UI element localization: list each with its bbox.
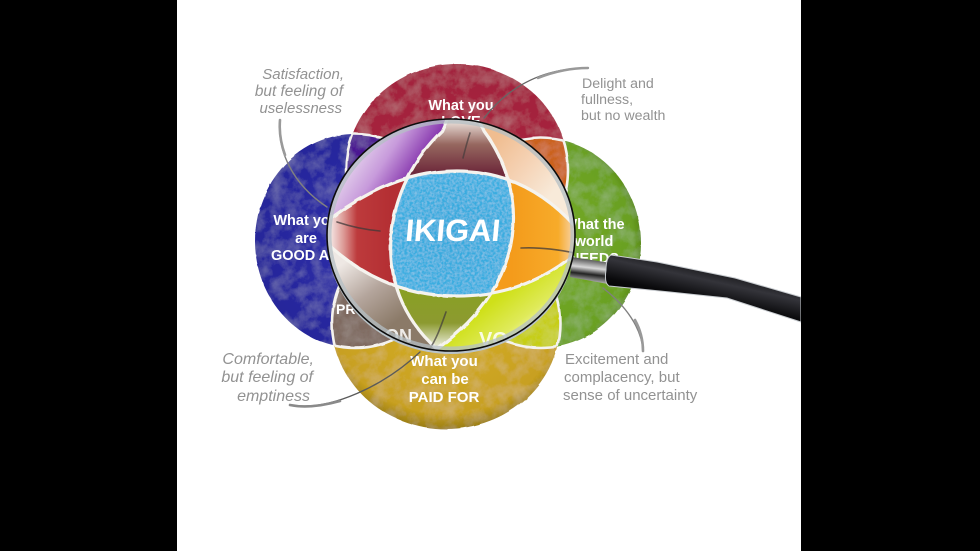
label: what you are good at: GOOD AT <box>271 248 337 264</box>
note: comfortable: emptiness <box>237 388 310 405</box>
lens rim <box>330 122 572 348</box>
note: excitement: sense of uncertainty <box>563 387 698 404</box>
note: comfortable: Comfortable, <box>222 351 314 368</box>
circle: what the world needs <box>441 138 641 348</box>
label: what you are good at: What you <box>273 213 339 229</box>
label: what you love: What you <box>428 98 494 114</box>
magnified overlap labels: VO <box>479 329 508 351</box>
circle: what you love <box>346 64 568 276</box>
note: delight: fullness, <box>581 92 633 108</box>
overlap: vocation <box>508 300 560 347</box>
note: comfortable: but feeling of <box>221 369 315 386</box>
leader: excitement <box>603 288 643 351</box>
IKIGAI title: IKIGAI <box>404 213 502 248</box>
label: what you love: LOVE <box>441 114 481 130</box>
label: what you can be paid for: can be <box>421 371 469 388</box>
note: comfortable <box>221 351 315 405</box>
handle neck <box>570 257 611 284</box>
white page panel <box>177 0 801 551</box>
magnified leader lines <box>337 133 575 350</box>
label: what you love <box>428 98 494 130</box>
label: what you are good at: are <box>295 231 317 247</box>
venn diagram circles <box>255 64 641 429</box>
overlap: passion <box>347 134 380 170</box>
lens contents <box>328 120 574 350</box>
label: profession fragment: PR <box>336 301 355 317</box>
label: what the world needs <box>563 217 625 267</box>
note: delight: Delight and <box>582 76 654 92</box>
note: excitement: complacency, but <box>564 369 680 386</box>
note: delight: but no wealth <box>581 108 665 124</box>
circle: what you can be paid for <box>332 217 560 429</box>
note: excitement: Excitement and <box>565 351 668 368</box>
label: what the world needs: world <box>574 234 613 250</box>
label: what the world needs: What the <box>563 217 625 233</box>
note: excitement <box>563 351 698 404</box>
overlap: mission <box>524 138 567 188</box>
label: what the world needs: NEEDS <box>569 251 619 267</box>
note: satisfaction <box>255 66 345 117</box>
leader: satisfaction <box>280 120 327 207</box>
note: satisfaction: Satisfaction, <box>262 66 344 83</box>
magnified overlap labels <box>386 329 507 346</box>
label: what you are good at <box>271 213 339 264</box>
label: what you can be paid for: What you <box>410 353 478 370</box>
overlap outlines <box>330 132 570 350</box>
note: delight <box>581 76 665 124</box>
circle: what you are good at <box>255 134 455 348</box>
note: satisfaction: but feeling of <box>255 83 345 100</box>
leader: comfortable <box>290 352 420 406</box>
label: what you can be paid for <box>409 353 479 406</box>
handle grip <box>605 255 801 322</box>
lens region borders <box>329 120 574 350</box>
magnified overlap labels: ON <box>385 326 412 346</box>
magnifier handle <box>570 255 801 322</box>
leader: delight <box>484 68 588 118</box>
label: what you can be paid for: PAID FOR <box>409 389 479 406</box>
overlap: profession <box>332 289 391 347</box>
magnifying lens <box>326 118 576 354</box>
note: satisfaction: uselessness <box>259 100 342 117</box>
